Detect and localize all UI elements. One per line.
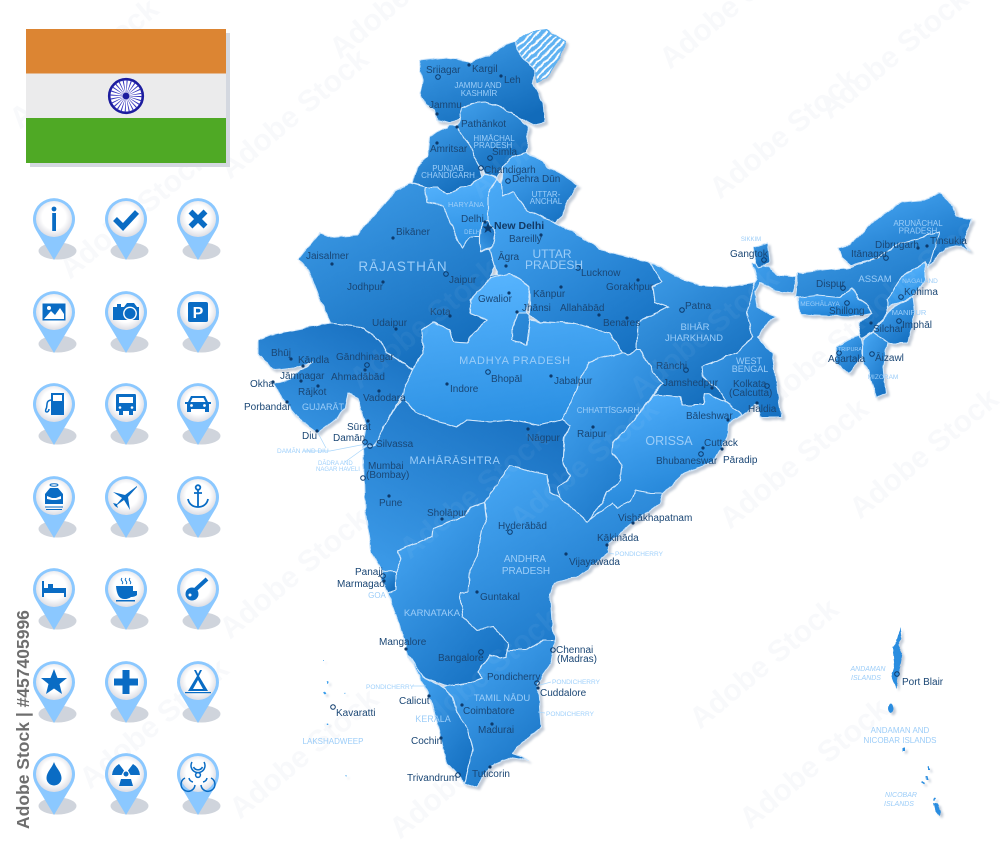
watermark over map: Adobe Stock — [503, 392, 665, 535]
state labels: ARUNĀCHAL — [893, 219, 943, 228]
pin: airplane — [105, 476, 148, 538]
state: Himachal Pradesh — [457, 102, 528, 177]
city labels: Trivandrum — [407, 773, 457, 784]
background watermark: Adobe Stock — [213, 502, 375, 645]
city labels: (Calcutta) — [729, 388, 772, 399]
city labels: Mumbai — [368, 461, 404, 472]
state labels: ISLANDS — [884, 801, 914, 808]
state labels: KERALA — [415, 714, 451, 724]
city labels: Vishākhapatnam — [618, 513, 692, 524]
city labels: Marmagao — [337, 579, 385, 590]
city labels: Chennai — [556, 645, 593, 656]
city labels: Pune — [379, 498, 403, 509]
pin: star — [33, 661, 76, 723]
city labels: Jaisalmer — [306, 251, 349, 262]
Nicobar islands — [903, 748, 941, 816]
city labels: Jammu — [429, 100, 462, 111]
union territory labels: DĀDRA AND — [318, 460, 353, 467]
city labels: Kākināda — [597, 533, 639, 544]
state: Jammu and Kashmir — [418, 42, 545, 125]
union territory labels: PONDICHERRY — [366, 684, 415, 691]
state labels: TRIPURA — [838, 347, 862, 353]
city labels: Jhānsi — [522, 303, 551, 314]
city labels: Nāgpur — [527, 433, 560, 444]
city labels: Amritsar — [430, 144, 468, 155]
watermark over map: Adobe Stock — [393, 422, 555, 565]
state labels: NAGALAND — [902, 278, 938, 285]
map of India — [258, 30, 972, 816]
city labels: Cuttack — [704, 438, 739, 449]
city labels: Gwalior — [478, 294, 513, 305]
state labels: RĀJASTHĀN — [358, 259, 448, 274]
city labels: Silvassa — [376, 439, 414, 450]
background watermark: Adobe Stock — [743, 282, 905, 425]
city labels: Okha — [250, 379, 274, 390]
union territory labels: DAMĀN AND DIU — [277, 447, 329, 455]
city labels: Itānagar — [851, 249, 888, 260]
state labels: PRADESH — [474, 141, 513, 150]
city labels: Pathānkot — [461, 119, 506, 130]
state labels: DELHI — [464, 230, 482, 236]
city labels: Sriiagar — [426, 65, 461, 76]
pin: car — [177, 383, 220, 445]
state: Manipur — [873, 297, 915, 343]
state: Sikkim — [753, 243, 770, 267]
city labels: Udaipur — [372, 318, 408, 329]
city labels: Gorakhpur — [606, 282, 654, 293]
union territory labels: NAGAR HAVELI — [316, 467, 360, 473]
pin: bus — [105, 383, 148, 445]
state labels: PRADESH — [899, 226, 938, 236]
pin: water drop — [33, 753, 76, 815]
city labels: Dehra Dūn — [512, 174, 560, 185]
watermark over map — [343, 62, 995, 745]
state labels: NICOBAR — [885, 792, 917, 799]
state: Madhya Pradesh — [403, 273, 622, 427]
state: Goa — [382, 570, 395, 593]
state labels: MIZORAM — [868, 374, 898, 381]
city labels: Bāleshwar — [686, 411, 733, 422]
state labels: HIMĀCHAL — [473, 134, 515, 143]
state labels: MADHYA PRADESH — [459, 355, 571, 367]
watermark over map: Adobe Stock — [833, 202, 995, 345]
state labels: BENGAL — [732, 364, 768, 374]
city labels: Port Blair — [902, 677, 944, 688]
state labels: ORISSA — [645, 434, 693, 448]
state labels: MEGHĀLAYA — [800, 300, 840, 308]
city labels: Cuddalore — [540, 688, 587, 699]
city labels: Sholāpur — [427, 508, 468, 519]
state labels: PRADESH — [502, 566, 550, 577]
state: Karnataka — [388, 503, 508, 687]
leader lines for territories — [303, 433, 614, 713]
pin: picture — [33, 291, 76, 353]
union territory labels — [277, 447, 664, 718]
state: Haryana — [425, 173, 497, 247]
pin: anchor — [177, 476, 220, 538]
state: Kerala — [408, 655, 473, 783]
state: Delhi — [480, 220, 495, 252]
pin: parking: P — [193, 305, 204, 322]
pin: fuel pump — [33, 383, 76, 445]
state: Maharashtra — [363, 398, 570, 572]
state: Rajasthan — [298, 183, 510, 370]
city labels: Pondicherry — [487, 672, 540, 683]
state labels: GOA — [368, 591, 387, 600]
state labels: LAKSHADWEEP — [303, 737, 363, 746]
pin: coffee cup — [105, 568, 148, 630]
city labels: Bhubaneswar — [656, 456, 718, 467]
state labels: ISLANDS — [851, 675, 881, 682]
pin: biohazard — [177, 753, 220, 815]
city labels: (Madras) — [557, 654, 597, 665]
state labels — [302, 81, 943, 808]
city labels: Āgra — [498, 251, 520, 263]
watermark over map: Adobe Stock — [463, 62, 625, 205]
state: Meghalaya — [798, 288, 872, 317]
city labels: Vadodara — [363, 393, 406, 404]
city labels: Bikāner — [396, 227, 431, 238]
city labels — [244, 64, 967, 784]
city labels: Jāmnagar — [280, 371, 325, 382]
city labels: Kohima — [904, 287, 938, 298]
city labels: Haldia — [748, 404, 777, 415]
state: Punjab — [412, 125, 482, 195]
background watermark: Adobe Stock — [733, 692, 895, 835]
city labels: Āizawl — [875, 352, 904, 364]
city labels: Kolkata — [733, 379, 767, 390]
city labels: Sūrat — [347, 422, 371, 433]
city labels: Kavaratti — [336, 708, 375, 719]
city labels: Imphāl — [902, 320, 932, 331]
flag of India — [26, 29, 230, 167]
background watermark: Adobe Stock — [703, 62, 865, 205]
city labels: Shillong — [829, 306, 865, 317]
capital star — [482, 222, 494, 233]
city labels: Agartala — [828, 354, 866, 365]
city labels: Gāndhinagar — [336, 352, 394, 363]
state labels: JHARKHAND — [665, 333, 723, 344]
stock id caption: Adobe Stock | #457405996 — [13, 610, 33, 829]
city labels: New Delhi — [494, 220, 544, 232]
city labels: Bareilly — [509, 234, 542, 245]
city labels: Benares — [603, 318, 640, 329]
city labels: Mangalore — [379, 637, 427, 648]
pin: cross — [177, 198, 220, 260]
city labels: Indore — [450, 384, 479, 395]
city labels: Jabalpur — [554, 376, 593, 387]
city labels: Delhi — [461, 214, 484, 225]
state: Chhattisgarh — [558, 350, 663, 522]
city labels: Chandigarh — [484, 165, 536, 176]
union territory labels: PONDICHERRY — [546, 711, 595, 718]
state labels: JAMMU AND — [454, 81, 502, 90]
city labels: Porbandar — [244, 402, 291, 413]
state labels: ANCHAL — [530, 197, 563, 206]
city markers: filled — [271, 63, 929, 769]
state labels: KARNATAKA — [404, 608, 461, 619]
state: Uttar Pradesh — [488, 178, 668, 355]
pin: tent — [177, 661, 220, 723]
state: Tamil Nadu — [443, 640, 555, 787]
city labels: Guntakal — [480, 592, 520, 603]
city labels: Rājkot — [298, 387, 327, 398]
state: Uttaranchal — [502, 153, 578, 223]
city labels: Ahmadābād — [331, 372, 385, 383]
state: West Bengal — [702, 263, 797, 417]
state labels: UTTAR- — [532, 190, 561, 199]
city labels: Kargil — [472, 64, 498, 75]
state labels: MANIPUR — [892, 308, 927, 317]
state: Andhra Pradesh — [460, 465, 663, 650]
city labels: Leh — [504, 75, 521, 86]
state labels: CHANDĪGARH — [421, 171, 475, 180]
state labels: PUNJAB — [432, 164, 464, 173]
Little Andaman — [888, 703, 894, 713]
pin: parking — [177, 291, 220, 353]
background watermark: Adobe Stock — [713, 392, 875, 535]
city labels: Kota — [430, 307, 451, 318]
state labels: KASHMĪR — [461, 89, 497, 98]
state labels: ASSAM — [858, 274, 892, 285]
watermark over map: Adobe Stock — [623, 262, 785, 405]
state labels: ANDAMAN AND — [871, 726, 930, 735]
city labels: Raipur — [577, 429, 607, 440]
pin: radiation — [105, 753, 148, 815]
pin: medical cross — [105, 661, 148, 723]
union territory labels: PONDICHERRY — [552, 679, 601, 686]
state labels: SIKKIM — [741, 237, 761, 243]
state: Arunachal Pradesh — [838, 193, 972, 268]
state: Tripura — [835, 335, 862, 373]
state labels: ANDHRA — [504, 554, 546, 565]
city labels: Calicut — [399, 696, 430, 707]
city labels: Cochin — [411, 736, 442, 747]
city labels: Pāradip — [723, 455, 758, 466]
city labels: Bangalore — [438, 653, 484, 664]
city labels: Damān — [333, 433, 365, 444]
state labels: GUJARĀT — [302, 402, 344, 412]
background watermark: Adobe Stock — [383, 702, 545, 844]
city labels: Tinsukia — [930, 236, 967, 247]
background watermark: Adobe Stock — [53, 142, 215, 285]
city labels: Patna — [685, 301, 712, 312]
city labels: Jamshedpur — [663, 378, 719, 389]
city labels: Allahābād — [560, 303, 604, 314]
city labels: Madurai — [478, 725, 514, 736]
pin: train — [33, 476, 76, 538]
city labels: Lucknow — [581, 268, 621, 279]
state: Gujarat — [258, 323, 413, 447]
state labels: WEST — [736, 356, 763, 366]
state labels: HARYĀNA — [448, 200, 484, 209]
icon grid — [33, 198, 220, 815]
state labels: CHHATTĪSGARH — [577, 406, 639, 415]
city labels: Kānpur — [533, 289, 566, 300]
state: Bihar and Jharkhand — [637, 262, 755, 405]
state labels: MAHĀRĀSHTRA — [410, 455, 501, 467]
watermark over map: Adobe Stock — [403, 602, 565, 745]
watermark over map: Adobe Stock — [343, 252, 505, 395]
city markers: hollow — [331, 75, 903, 777]
state labels: ANDAMAN — [849, 666, 886, 673]
state labels: NICOBAR ISLANDS — [864, 736, 936, 745]
city labels: Hyderābād — [498, 521, 547, 532]
state: Orissa — [590, 393, 743, 520]
city labels: Kāndla — [298, 355, 330, 366]
city labels: Rānchi — [656, 361, 687, 372]
state labels: BIHĀR — [680, 322, 710, 333]
city labels: Bhūj — [271, 348, 291, 359]
state labels: TAMIL NĀDU — [474, 693, 530, 704]
background watermark: Adobe Stock — [73, 652, 235, 795]
background watermark: Adobe Stock — [213, 42, 375, 185]
city labels: Silchar — [873, 324, 904, 335]
city labels: Coimbatore — [463, 706, 515, 717]
state: Nagaland — [887, 262, 925, 308]
Andaman islands — [892, 628, 902, 688]
pin: bed — [33, 568, 76, 630]
Lakshadweep islands — [322, 660, 348, 777]
state: Assam — [795, 232, 945, 340]
state: Mizoram — [862, 332, 888, 397]
pin: key — [177, 568, 220, 630]
city labels: Dispur — [816, 279, 846, 290]
city labels: Vijayawada — [569, 557, 620, 568]
city labels: Jodhpur — [347, 282, 384, 293]
city labels: Gangtok — [730, 249, 769, 260]
city labels: Bhopāl — [491, 374, 522, 385]
pin: check mark — [105, 198, 148, 260]
union territory labels: PONDICHERRY — [615, 551, 664, 558]
city labels: Tuticorin — [472, 769, 510, 780]
city labels: Jaipur — [449, 275, 477, 286]
state labels: PRADESH — [525, 258, 583, 272]
city labels: Simla — [492, 147, 517, 158]
background watermark: Adobe Stock — [683, 592, 845, 735]
pin: camera — [105, 291, 148, 353]
background watermark: Adobe Stock — [223, 682, 385, 825]
state: Aksai Chin hatched — [515, 30, 566, 82]
state labels: UTTAR — [532, 247, 572, 261]
city labels: Dibrugarh — [875, 240, 919, 251]
pin: information — [33, 198, 76, 260]
city labels: Diu — [302, 431, 317, 442]
city labels: (Bombay) — [366, 470, 409, 481]
city labels: Panaji — [355, 567, 383, 578]
